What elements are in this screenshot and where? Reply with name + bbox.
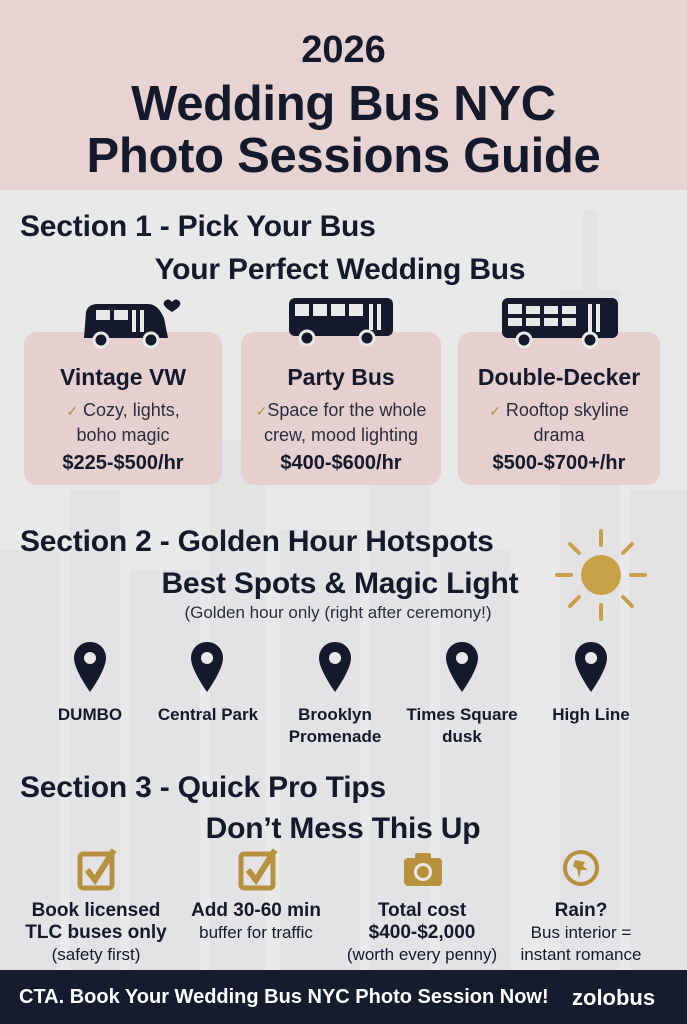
subheading: perfect bus: Your Perfect Wedding Bus — [155, 253, 525, 286]
tips text: instant romance — [521, 945, 641, 964]
location labels: Promenade — [289, 727, 381, 746]
tips text: Book licensed — [32, 900, 160, 921]
location labels: DUMBO — [58, 705, 122, 724]
section 2 heading: Section 2 - Golden Hour Hotspots — [20, 525, 494, 558]
subtitle: (Golden hour only (right after ceremony!) — [184, 603, 492, 622]
card: double-decker: ✓ Rooftop skyline — [489, 400, 629, 420]
footer CTA bar — [0, 970, 687, 1024]
tips text: $400-$2,000 — [369, 922, 475, 943]
card: vintage VW: ✓ Cozy, lights, — [66, 400, 180, 420]
card: vintage VW: $225-$500/hr — [62, 452, 184, 474]
location labels: dusk — [442, 727, 482, 746]
tip icons — [78, 848, 599, 890]
background skyline — [0, 190, 687, 970]
card: party bus: $400-$600/hr — [280, 452, 402, 474]
title: 2026 — [301, 29, 386, 71]
subheading: don't mess: Don’t Mess This Up — [206, 812, 480, 845]
card: vintage VW — [24, 332, 222, 485]
tips text: Total cost — [378, 900, 466, 921]
location labels: Times Square — [406, 705, 518, 724]
tips text: Bus interior = — [531, 923, 631, 942]
tips text: Add 30-60 min — [191, 900, 321, 921]
location labels: Central Park — [158, 705, 258, 724]
card: double-decker: drama — [533, 425, 585, 445]
card: party bus — [241, 332, 441, 485]
header band — [0, 0, 687, 190]
location labels: Brooklyn — [298, 705, 372, 724]
location labels — [58, 705, 630, 746]
tips text: TLC buses only — [25, 922, 167, 943]
card: double-decker: Double-Decker — [478, 364, 640, 390]
card: double-decker — [458, 332, 660, 485]
section 3 heading: Section 3 - Quick Pro Tips — [20, 771, 386, 804]
card: vintage VW: Vintage VW — [60, 364, 186, 390]
section 1 heading: Section 1 - Pick Your Bus — [20, 210, 376, 243]
title — [86, 29, 601, 183]
card: double-decker: $500-$700+/hr — [493, 452, 625, 474]
tips text: buffer for traffic — [199, 923, 313, 942]
tips text: (safety first) — [52, 945, 140, 964]
tips text: (worth every penny) — [347, 945, 497, 964]
footer CTA bar: CTA. Book Your Wedding Bus NYC Photo Session Now! — [19, 986, 549, 1008]
location pins — [74, 642, 607, 692]
card: party bus: crew, mood lighting — [264, 425, 418, 445]
title: Photo Sessions Guide — [86, 129, 601, 183]
card: vintage VW: boho magic — [76, 425, 170, 445]
icon: party bus — [289, 298, 393, 346]
icon: double-decker — [502, 298, 618, 348]
icon: VW van — [84, 300, 180, 348]
location labels: High Line — [552, 705, 630, 724]
card: party bus: Party Bus — [287, 364, 395, 390]
title: Wedding Bus NYC — [131, 77, 556, 131]
footer CTA bar: zolobus — [572, 985, 655, 1010]
icon: sun — [555, 529, 647, 621]
card: party bus: ✓Space for the whole — [256, 400, 426, 420]
subheading: best spots: Best Spots & Magic Light — [162, 567, 518, 600]
tips text: Rain? — [555, 900, 607, 921]
